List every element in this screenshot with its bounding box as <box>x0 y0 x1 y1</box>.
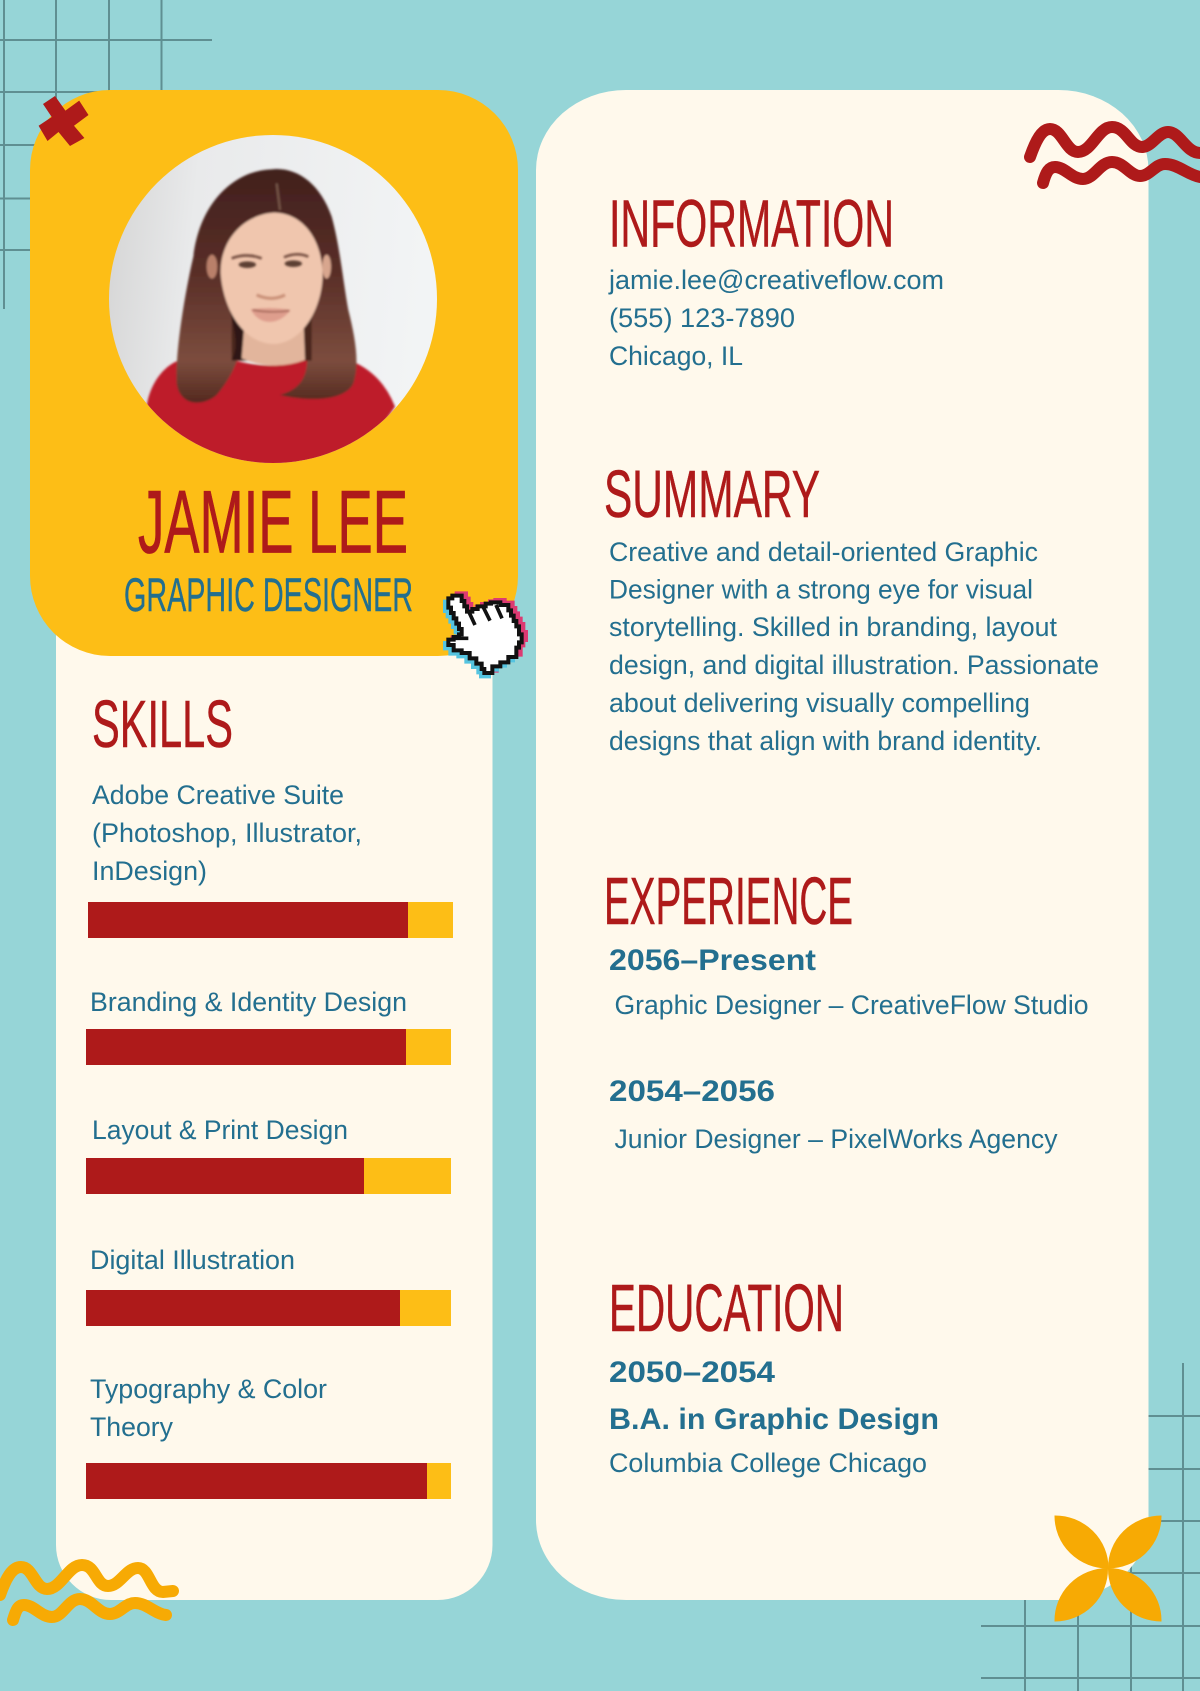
education details: Columbia College Chicago <box>609 1448 927 1478</box>
skill: Adobe Creative Suite <box>88 780 453 938</box>
education heading: EDUCATION <box>609 1271 844 1346</box>
skill: Adobe Creative Suite: (Photoshop, Illustrator, <box>92 818 362 848</box>
job: 2054–2056 <box>609 1075 1058 1154</box>
contact details <box>608 265 944 371</box>
skill: Typography & Color Theory: Theory <box>90 1412 174 1442</box>
job: 2056–Present: Graphic Designer – CreativeFlow Studio <box>614 990 1088 1020</box>
information heading: INFORMATION <box>609 187 894 262</box>
squiggle: orange <box>0 1565 173 1620</box>
skill: Adobe Creative Suite: InDesign) <box>92 856 207 886</box>
panel: profile card <box>30 90 518 656</box>
contact details: (555) 123-7890 <box>609 303 795 333</box>
section: summary <box>604 457 1099 756</box>
experience heading: EXPERIENCE <box>604 864 853 939</box>
summary paragraph: Creative and detail-oriented Graphic <box>609 537 1038 567</box>
icon: red cross <box>39 96 88 146</box>
section: experience <box>604 864 1088 1154</box>
portrait photo <box>109 135 437 483</box>
summary paragraph: about delivering visually compelling <box>609 688 1030 718</box>
summary paragraph: Designer with a strong eye for visual <box>609 574 1033 604</box>
summary paragraph <box>609 537 1099 756</box>
education details: B.A. in Graphic Design <box>609 1403 939 1436</box>
job title: GRAPHIC DESIGNER <box>124 568 413 621</box>
panel: right column background <box>536 90 1148 1600</box>
section: education <box>609 1271 939 1478</box>
skill: Layout & Print Design <box>86 1115 451 1194</box>
grid: bottom right <box>981 1363 1200 1691</box>
skills heading: SKILLS <box>92 687 233 762</box>
name: JAMIE LEE <box>138 472 408 572</box>
skill: Typography & Color Theory: Typography & Color <box>90 1374 327 1404</box>
icon: pixel hand cursor <box>445 593 526 676</box>
skill: Digital Illustration: Digital Illustration <box>90 1245 295 1275</box>
skill: Digital Illustration <box>86 1245 451 1326</box>
skill: Layout & Print Design: Layout & Print Design <box>92 1115 348 1145</box>
job: 2054–2056: 2054–2056 <box>609 1075 775 1108</box>
skill: Typography & Color Theory <box>86 1374 451 1499</box>
job: 2056–Present <box>609 944 1088 1020</box>
summary paragraph: design, and digital illustration. Passionate <box>609 650 1099 680</box>
contact details: jamie.lee@creativeflow.com <box>608 265 944 295</box>
contact details: Chicago, IL <box>609 341 743 371</box>
skill: Adobe Creative Suite: Adobe Creative Suite <box>92 780 344 810</box>
grid: top left <box>0 0 212 309</box>
skill: Branding & Identity Design: Branding & Identity Design <box>90 987 407 1017</box>
section: skills <box>86 687 453 1499</box>
squiggle: red <box>1030 127 1200 183</box>
summary paragraph: designs that align with brand identity. <box>609 726 1042 756</box>
job: 2054–2056: Junior Designer – PixelWorks Agency <box>614 1124 1058 1154</box>
skill: Branding & Identity Design <box>86 987 451 1065</box>
summary heading: SUMMARY <box>604 457 820 532</box>
education details: 2050–2054 <box>609 1356 775 1389</box>
summary paragraph: storytelling. Skilled in branding, layout <box>609 612 1058 642</box>
icon: orange flower <box>1055 1516 1161 1621</box>
section: information <box>608 187 944 371</box>
job: 2056–Present: 2056–Present <box>609 944 816 977</box>
education details <box>609 1356 939 1478</box>
panel: skills background <box>56 500 492 1600</box>
